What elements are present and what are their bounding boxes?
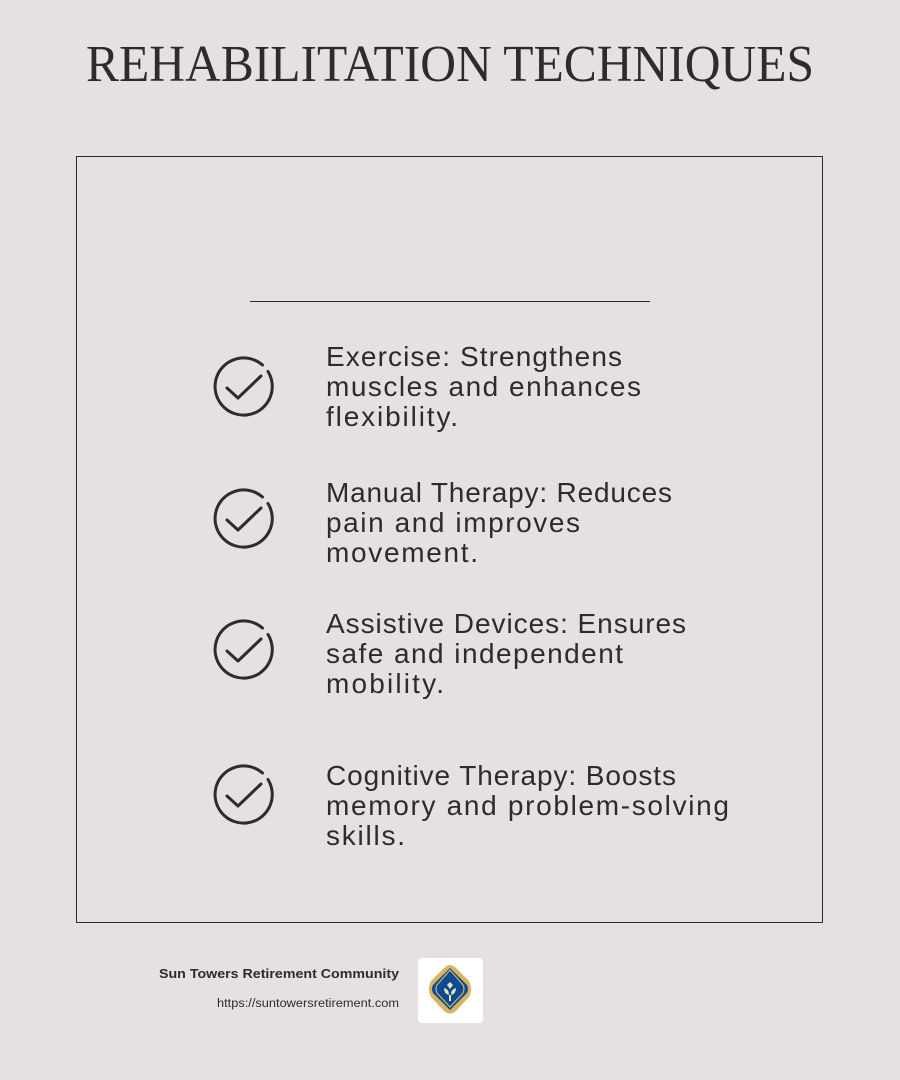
text: cognitive therapy	[326, 760, 729, 851]
text: manual therapy: movement.	[326, 537, 478, 568]
icon: check circle	[215, 621, 272, 678]
text: manual therapy	[326, 477, 672, 568]
text: assistive devices: safe and independent	[326, 638, 623, 669]
text: cognitive therapy: skills.	[326, 820, 405, 851]
icon: check circle	[215, 490, 272, 547]
item: cognitive therapy	[215, 760, 729, 851]
text: cognitive therapy: memory and problem-solving	[326, 790, 729, 821]
text: exercise: Exercise: Strengthens	[326, 341, 622, 372]
footer: website url: https://suntowersretirement.com	[217, 998, 399, 1010]
footer: organisation name: Sun Towers Retirement Community	[159, 966, 400, 981]
text: cognitive therapy: Cognitive Therapy: Boosts	[326, 760, 676, 791]
text: assistive devices: mobility.	[326, 668, 444, 699]
icon: check circle	[215, 358, 272, 415]
text: exercise: muscles and enhances	[326, 371, 641, 402]
item: manual therapy	[215, 477, 672, 568]
icon: logo badge	[418, 958, 483, 1023]
text: manual therapy: Manual Therapy: Reduces	[326, 477, 672, 508]
item: exercise	[215, 341, 641, 432]
icon: check circle	[215, 766, 272, 823]
title: REHABILITATION TECHNIQUES	[86, 36, 814, 93]
text: exercise	[326, 341, 641, 432]
text: assistive devices	[326, 608, 686, 699]
panel: techniques frame	[76, 156, 822, 922]
text: exercise: flexibility.	[326, 401, 458, 432]
item: assistive devices	[215, 608, 686, 699]
text: assistive devices: Assistive Devices: Ensures	[326, 608, 686, 639]
text: manual therapy: pain and improves	[326, 507, 580, 538]
